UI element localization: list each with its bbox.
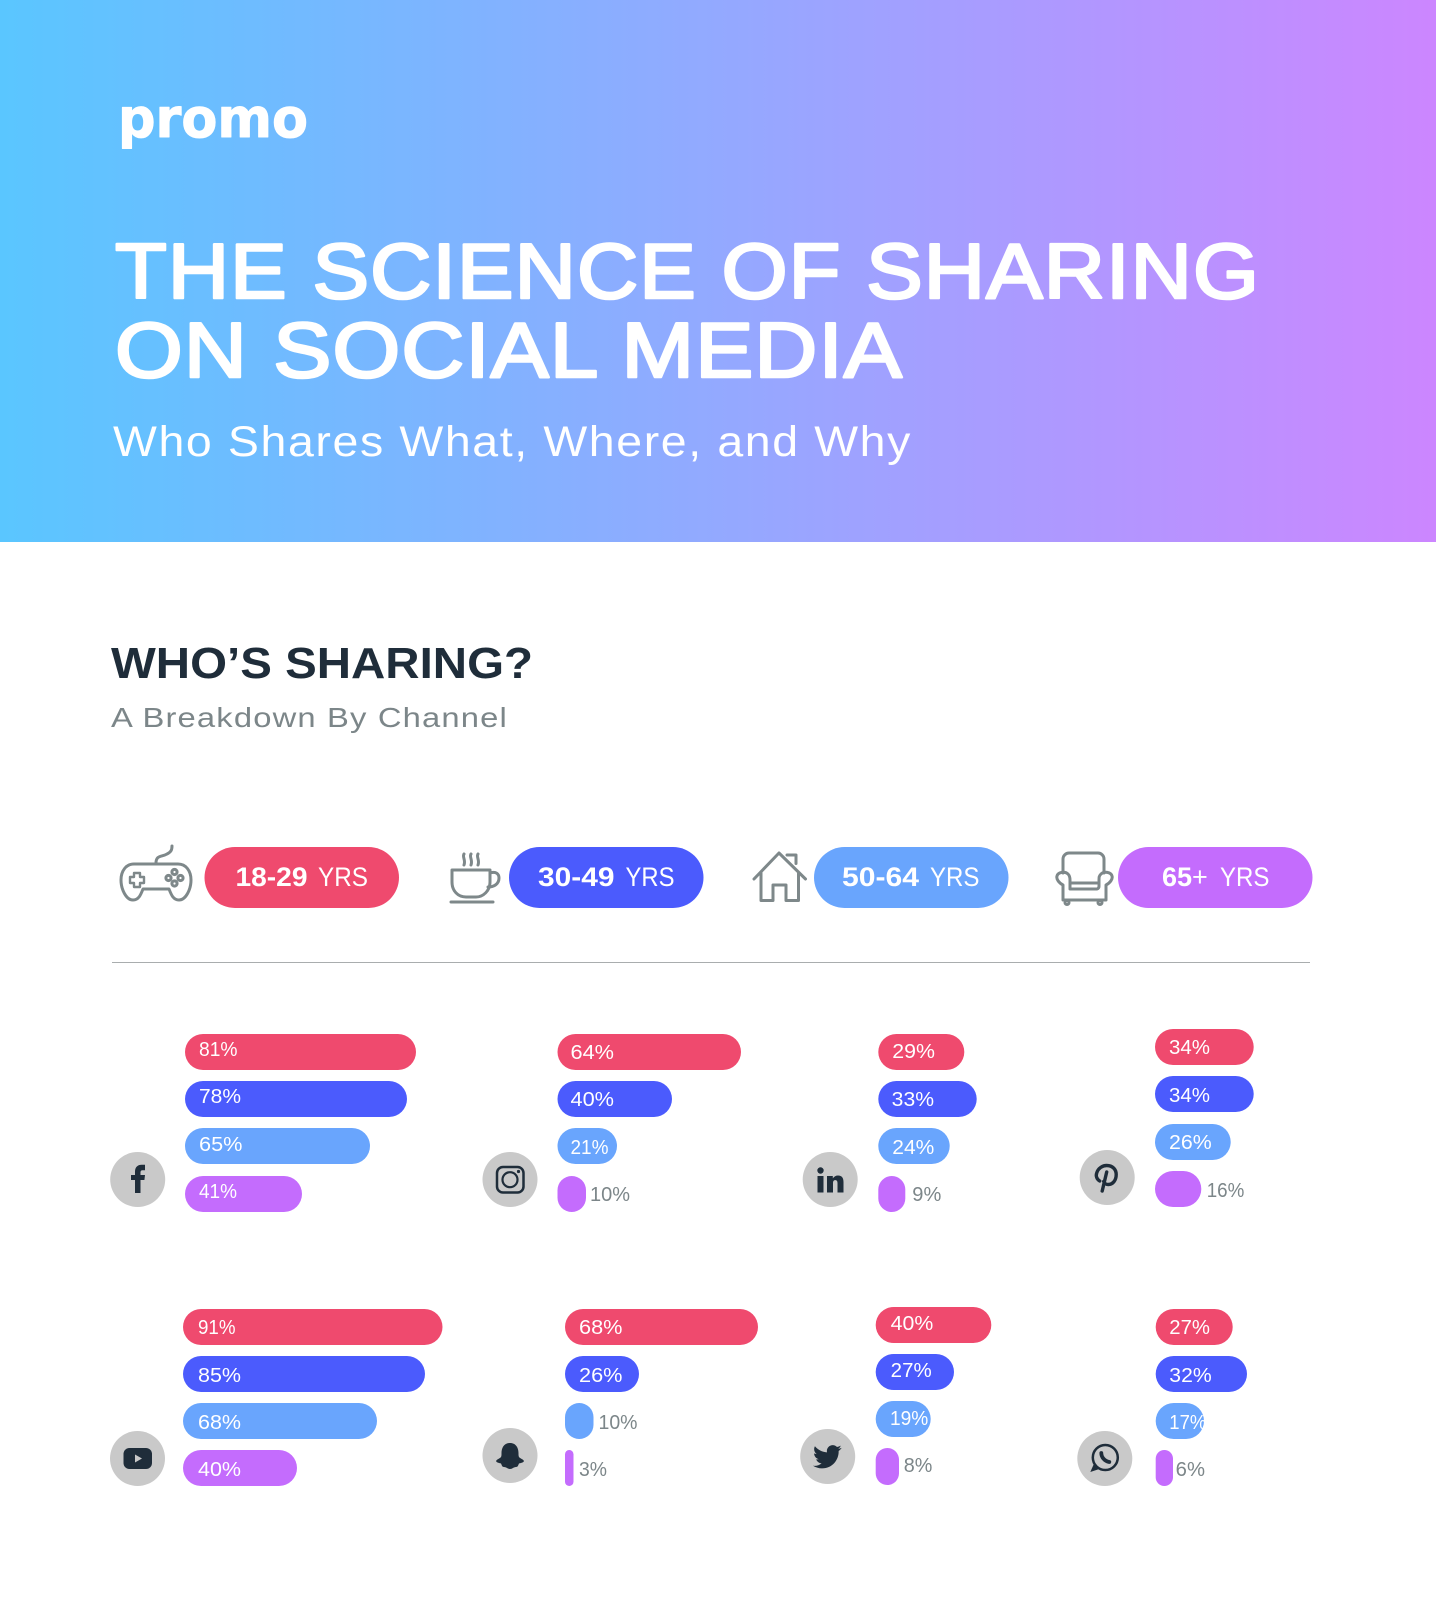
bars: twitter: 19%	[890, 1408, 929, 1430]
bars: snapchat: 68%	[579, 1317, 623, 1339]
icon: instagram	[482, 1152, 538, 1207]
legend pill: 65+: 65+	[1162, 862, 1208, 892]
bars: twitter: 27%	[891, 1360, 932, 1382]
bars: whatsapp: 6%	[1176, 1459, 1205, 1481]
bars: pinterest: 34%	[1169, 1085, 1210, 1107]
legend pill: 50-64: YRS	[930, 862, 980, 892]
bars: linkedin: 29%	[892, 1041, 935, 1063]
bars: youtube: 85%	[198, 1365, 241, 1387]
logo: promo: promo	[118, 87, 308, 150]
bars: linkedin	[878, 1034, 977, 1212]
panel: whatsapp	[1077, 1309, 1247, 1486]
section heading	[111, 639, 533, 733]
legend pill: 30-49: 30-49	[538, 862, 614, 892]
icon: snapchat	[482, 1428, 538, 1483]
subheading: A Breakdown By Channel	[111, 702, 508, 733]
header banner	[0, 0, 1436, 542]
bars: instagram	[558, 1034, 741, 1212]
bars: twitter	[876, 1307, 991, 1485]
legend pill: 30-49: YRS	[626, 862, 674, 892]
legend pill: 50-64: 50-64	[842, 862, 919, 892]
icon: coffee cup	[451, 854, 499, 902]
title: THE SCIENCE OF SHARING	[115, 227, 1260, 315]
panel: linkedin	[803, 1034, 977, 1212]
legend pill: 18-29	[204, 847, 399, 908]
icon: youtube	[110, 1431, 165, 1486]
icon: facebook	[110, 1152, 165, 1207]
bars: pinterest: 26%	[1169, 1132, 1212, 1154]
bars: youtube: 40%	[198, 1459, 241, 1481]
bars: instagram: 64%	[570, 1042, 614, 1064]
legend	[121, 846, 1312, 908]
bars: youtube: 91%	[198, 1317, 236, 1339]
legend pill: 50-64	[814, 847, 1008, 908]
bars: facebook: 81%	[199, 1039, 238, 1061]
subtitle: Who Shares What, Where, and Why	[113, 418, 912, 466]
bars: pinterest	[1155, 1029, 1254, 1207]
bars: facebook: 41%	[199, 1181, 237, 1203]
bars: linkedin: 9%	[912, 1184, 942, 1206]
bars: instagram: 10%	[590, 1184, 630, 1206]
bars: whatsapp	[1156, 1309, 1247, 1486]
panel: facebook	[110, 1034, 416, 1212]
icon: pinterest	[1080, 1150, 1135, 1205]
bars: linkedin: 33%	[892, 1089, 934, 1111]
bars: snapchat: 3%	[579, 1459, 607, 1481]
panel: pinterest	[1080, 1029, 1254, 1207]
icon: twitter	[800, 1429, 855, 1484]
legend pill: 18-29: 18-29	[236, 862, 308, 892]
bars: linkedin: 24%	[892, 1137, 935, 1159]
bars: twitter: 8%	[904, 1455, 933, 1477]
legend pill: 65+	[1118, 847, 1312, 908]
bars: youtube: 68%	[198, 1412, 241, 1434]
bars: pinterest: 16%	[1207, 1180, 1245, 1202]
title: ON SOCIAL MEDIA	[115, 306, 903, 394]
panel: twitter	[800, 1307, 991, 1485]
bars: whatsapp: 32%	[1169, 1365, 1212, 1387]
bars: facebook: 65%	[199, 1134, 243, 1156]
bars: snapchat: 10%	[598, 1412, 638, 1434]
bars: facebook	[185, 1034, 416, 1212]
icon: game controller	[121, 846, 191, 900]
heading: who's sharing: WHO’S SHARING?	[111, 639, 533, 688]
bars: whatsapp: 17%	[1169, 1412, 1206, 1434]
panel: instagram	[482, 1034, 741, 1212]
panel: youtube	[110, 1309, 442, 1486]
icon: whatsapp	[1077, 1431, 1132, 1486]
bars: youtube	[183, 1309, 442, 1486]
icon: linkedin	[803, 1152, 858, 1207]
bars: facebook: 78%	[199, 1086, 241, 1108]
legend pill: 18-29: YRS	[318, 862, 368, 892]
bars: snapchat: 26%	[579, 1365, 623, 1387]
bars: whatsapp: 27%	[1169, 1317, 1210, 1339]
icon: house	[754, 853, 806, 900]
bars: instagram: 21%	[570, 1137, 609, 1159]
legend pill: 30-49	[509, 847, 704, 908]
bars: twitter: 40%	[891, 1313, 934, 1335]
bars: pinterest: 34%	[1169, 1037, 1210, 1059]
legend pill: 65+: YRS	[1220, 862, 1270, 892]
bars: instagram: 40%	[570, 1089, 614, 1111]
panel: snapchat	[482, 1309, 758, 1486]
icon: armchair	[1057, 853, 1112, 904]
bars: snapchat	[565, 1309, 758, 1486]
